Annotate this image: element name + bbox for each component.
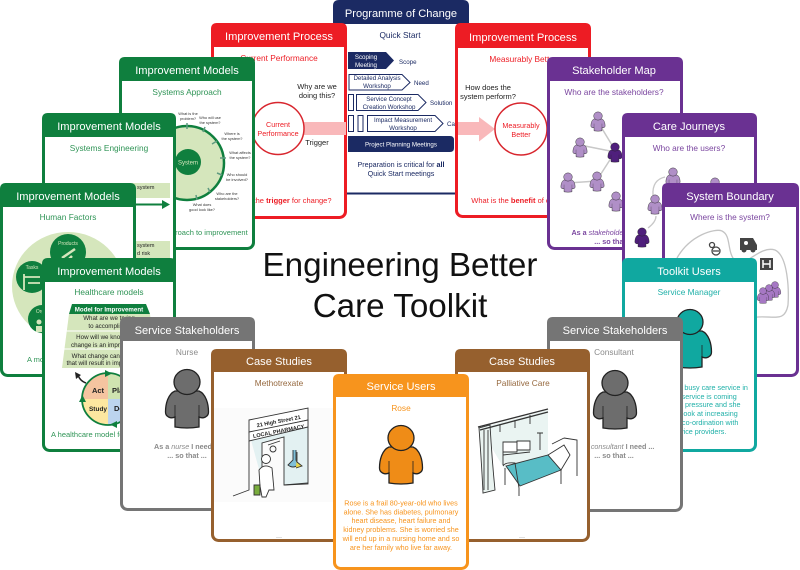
scoping meeting step: Scope	[399, 59, 417, 66]
black arrow	[75, 372, 86, 383]
panel: healthcare models	[42, 258, 176, 450]
pharmacy sketch: 21 High Street 21	[256, 415, 301, 429]
subtitle: Who are the users?	[653, 143, 726, 153]
PDSA cycle: Act	[92, 386, 105, 395]
panel: service stakeholders nurse	[120, 317, 255, 510]
system ring diagram	[150, 111, 251, 212]
rose description: will end up in a nursing home and so	[342, 534, 459, 543]
title: Engineering Better	[263, 247, 537, 284]
title: Care Toolkit	[313, 288, 487, 325]
question line two: doing this?	[299, 91, 335, 100]
system ring diagram: Where is	[224, 131, 240, 136]
nurse figure	[166, 370, 208, 428]
header	[547, 57, 683, 81]
PDSA cycle: Plan	[112, 386, 128, 395]
service concept step: Service Concept	[366, 96, 412, 103]
scoping meeting step: Meeting	[355, 62, 378, 69]
panel: care journeys	[622, 113, 757, 304]
header	[211, 349, 347, 372]
header	[120, 317, 255, 341]
human factors diagram: Products	[58, 241, 78, 247]
heading: Improvement Models	[57, 121, 161, 133]
subtitle: Human Factors	[40, 212, 96, 222]
preparation note: Preparation is critical for all	[357, 160, 445, 169]
detailed analysis step: Detailed Analysis	[353, 75, 401, 82]
rose description: heart disease, heart failure and	[351, 516, 451, 525]
model for improvement funnel: that will result in improvement?	[67, 360, 152, 367]
approach caption: A systems approach to improvement	[126, 228, 249, 237]
subtitle: Systems Engineering	[70, 143, 149, 153]
icon: ambulance	[740, 238, 757, 252]
panel: case studies palliative care	[455, 349, 590, 540]
detailed analysis step	[349, 74, 429, 90]
consultant caption line two: ... so that ...	[594, 451, 634, 460]
risk box	[100, 241, 170, 258]
system ring diagram: What affects	[229, 150, 251, 155]
rose description: Rose is a frail 80-year-old who lives	[344, 498, 458, 508]
trigger question: What is the trigger for change?	[226, 196, 332, 205]
PDSA cycle: Study	[89, 406, 107, 413]
title	[263, 247, 537, 325]
panel: programme of change	[333, 0, 469, 195]
model for improvement funnel: What are we trying	[83, 315, 135, 322]
header	[119, 57, 255, 81]
rose description: kidney problems. She is worried she	[343, 525, 459, 534]
panel: service stakeholders consultant	[547, 317, 683, 510]
consultant figure	[594, 370, 636, 429]
trigger label: Trigger	[305, 138, 329, 147]
icon: hospital	[760, 258, 773, 270]
system ring diagram: be involved?	[226, 177, 249, 182]
service manager description	[630, 383, 748, 436]
system ring diagram: stakeholders?	[215, 196, 240, 201]
subtitle: Where is the system?	[690, 212, 770, 222]
model for improvement funnel: change is an improvement?	[71, 342, 148, 349]
system ring diagram: problem?	[180, 116, 197, 121]
consultant caption: As a consultant I need ...	[574, 442, 654, 451]
impact measurement step	[348, 116, 462, 132]
circle label: Current	[266, 120, 290, 129]
stakeholder caption line two: ... so that ...	[594, 237, 634, 246]
system ring diagram: Who should	[227, 172, 247, 177]
subtitle: Current Performance	[240, 53, 318, 63]
system box: system	[137, 185, 155, 191]
model for improvement funnel: to accomplish?	[88, 323, 130, 330]
question: How does the	[465, 83, 511, 92]
circle label line two: Better	[511, 130, 531, 139]
subtitle: Healthcare models	[74, 287, 144, 297]
subtitle: Palliative Care	[496, 378, 550, 388]
improvement process header	[211, 23, 347, 47]
system ring diagram: the system?	[230, 155, 251, 160]
heading: System Boundary	[686, 191, 774, 203]
panel: system boundary	[662, 183, 799, 376]
model for improvement funnel: How will we know that a	[76, 334, 142, 341]
header	[42, 258, 176, 282]
service manager description: care through co-ordination with	[640, 418, 738, 427]
panel: human factors	[0, 183, 136, 376]
icon: clinician	[710, 242, 720, 255]
human factors diagram	[12, 232, 124, 340]
header	[662, 183, 799, 207]
risk box: d risk	[137, 251, 150, 257]
pharmacy sketch	[214, 408, 344, 502]
panel: case studies methotrexate	[211, 349, 347, 540]
heading: Care Journeys	[653, 121, 726, 133]
header	[333, 374, 469, 397]
rose figure	[380, 426, 422, 484]
programme header	[333, 0, 469, 24]
service concept step: Solution	[430, 100, 453, 107]
service manager figure	[668, 310, 712, 368]
heading: Improvement Models	[16, 191, 120, 203]
subtitle: Who are the stakeholders?	[564, 87, 664, 97]
header	[42, 113, 176, 137]
rose description	[342, 498, 459, 552]
pharmacy sketch: LOCAL PHARMACY	[253, 424, 305, 440]
question line two: system perform?	[460, 92, 516, 101]
service concept step: Creation Workshop	[363, 104, 416, 111]
circle label: Measurably	[502, 121, 540, 130]
ellipsis: ...	[519, 531, 525, 540]
panel: improvement process current performance	[211, 23, 347, 218]
nurse caption: As a nurse I need ...	[154, 442, 220, 451]
impact measurement step: Case	[447, 121, 462, 128]
panel: improvement process measurably better	[455, 23, 591, 216]
benefit question: What is the benefit of change?	[471, 196, 575, 205]
header	[0, 183, 136, 207]
subtitle: Nurse	[176, 347, 198, 357]
current performance circle	[252, 102, 304, 154]
service manager description: the city. The service is coming	[641, 392, 737, 401]
subtitle: Rose	[391, 403, 411, 413]
human factors caption: A model for human factors	[27, 355, 115, 364]
header	[547, 317, 683, 341]
measurably better circle	[495, 103, 547, 155]
system ring diagram: What does	[193, 202, 211, 207]
subtitle: Consultant	[594, 347, 635, 357]
human factors diagram: Org	[36, 309, 44, 315]
system ring diagram: good look like?	[189, 207, 216, 212]
scoping meeting step: Scoping	[355, 54, 378, 61]
rose description: alone. She has diabetes, pulmonary	[344, 508, 459, 516]
panel: systems approach	[119, 57, 255, 248]
panel: service users rose	[333, 374, 469, 568]
arrow	[100, 200, 170, 209]
heading: Service Stakeholders	[563, 325, 668, 337]
nurse caption line two: ... so that ...	[167, 451, 207, 460]
risk box: system	[137, 243, 155, 249]
panel: toolkit users	[622, 258, 757, 450]
preparation note second line: Quick Start meetings	[368, 169, 435, 178]
human factors diagram: Tasks	[26, 265, 39, 271]
system ring diagram: System	[178, 160, 198, 166]
system box	[100, 183, 170, 198]
PDSA cycle	[79, 370, 134, 428]
programme heading: Programme of Change	[345, 8, 457, 20]
system ring diagram: Who will use	[199, 115, 221, 120]
pink arrow	[458, 117, 495, 142]
panel: stakeholder map	[547, 57, 683, 248]
subtitle: Service Manager	[658, 287, 721, 297]
service manager description: other service providers.	[652, 427, 726, 436]
service manager description: Sam manages a busy care service in	[630, 383, 748, 392]
subtitle: Methotrexate	[255, 378, 304, 388]
question: Why are we	[297, 82, 337, 91]
quick start subtitle: Quick Start	[379, 30, 421, 40]
stakeholder caption: As a stakeholder I need ...	[571, 228, 657, 237]
model for improvement funnel: What change can we make	[72, 353, 147, 360]
circle label line two: Performance	[257, 129, 299, 138]
project planning meetings bar: Project Planning Meetings	[365, 142, 437, 148]
subtitle: Measurably Better	[489, 54, 557, 64]
heading: Stakeholder Map	[572, 65, 656, 77]
detailed analysis step: Workshop	[363, 83, 391, 90]
ellipsis: ...	[276, 531, 282, 540]
healthcare caption: A healthcare model for improvement	[51, 430, 172, 439]
improvement process header	[455, 23, 591, 48]
heading: Improvement Process	[225, 31, 333, 43]
bed sketch	[478, 409, 577, 496]
heading: Case Studies	[489, 356, 555, 368]
heading: Improvement Process	[469, 32, 577, 44]
system ring diagram: the system?	[222, 136, 243, 141]
impact measurement step: Workshop	[389, 125, 417, 132]
header	[455, 349, 590, 372]
boundary outline	[677, 230, 788, 320]
heading: Improvement Models	[57, 266, 161, 278]
journey people	[635, 168, 722, 247]
icon: people group	[757, 282, 781, 303]
system ring diagram: What is the	[178, 111, 198, 116]
heading: Toolkit Users	[657, 266, 721, 278]
header	[622, 258, 757, 282]
model for improvement funnel: Model for Improvement	[75, 306, 143, 314]
system ring diagram: the system?	[200, 120, 221, 125]
header	[622, 113, 757, 137]
service concept step	[348, 94, 453, 111]
project planning meetings bar	[348, 136, 454, 152]
PDSA cycle: Do	[114, 404, 124, 413]
service manager description: would like to look at increasing	[639, 409, 738, 418]
service manager description: under growing pressure and she	[637, 400, 741, 409]
model for improvement funnel	[62, 304, 156, 368]
heading: Service Stakeholders	[135, 325, 240, 337]
stakeholder network	[561, 112, 623, 211]
scoping meeting step	[348, 52, 417, 69]
heading: Improvement Models	[135, 65, 239, 77]
heading: Service Users	[366, 381, 436, 393]
heading: Case Studies	[246, 356, 312, 368]
rose description: are her family who live far away.	[350, 543, 452, 552]
detailed analysis step: Need	[414, 80, 429, 87]
system ring diagram: Who are the	[216, 191, 238, 196]
subtitle: Systems Approach	[152, 87, 222, 97]
pink arrow band	[304, 122, 346, 135]
panel: systems engineering	[42, 113, 176, 304]
impact measurement step: Impact Measurement	[374, 117, 432, 124]
